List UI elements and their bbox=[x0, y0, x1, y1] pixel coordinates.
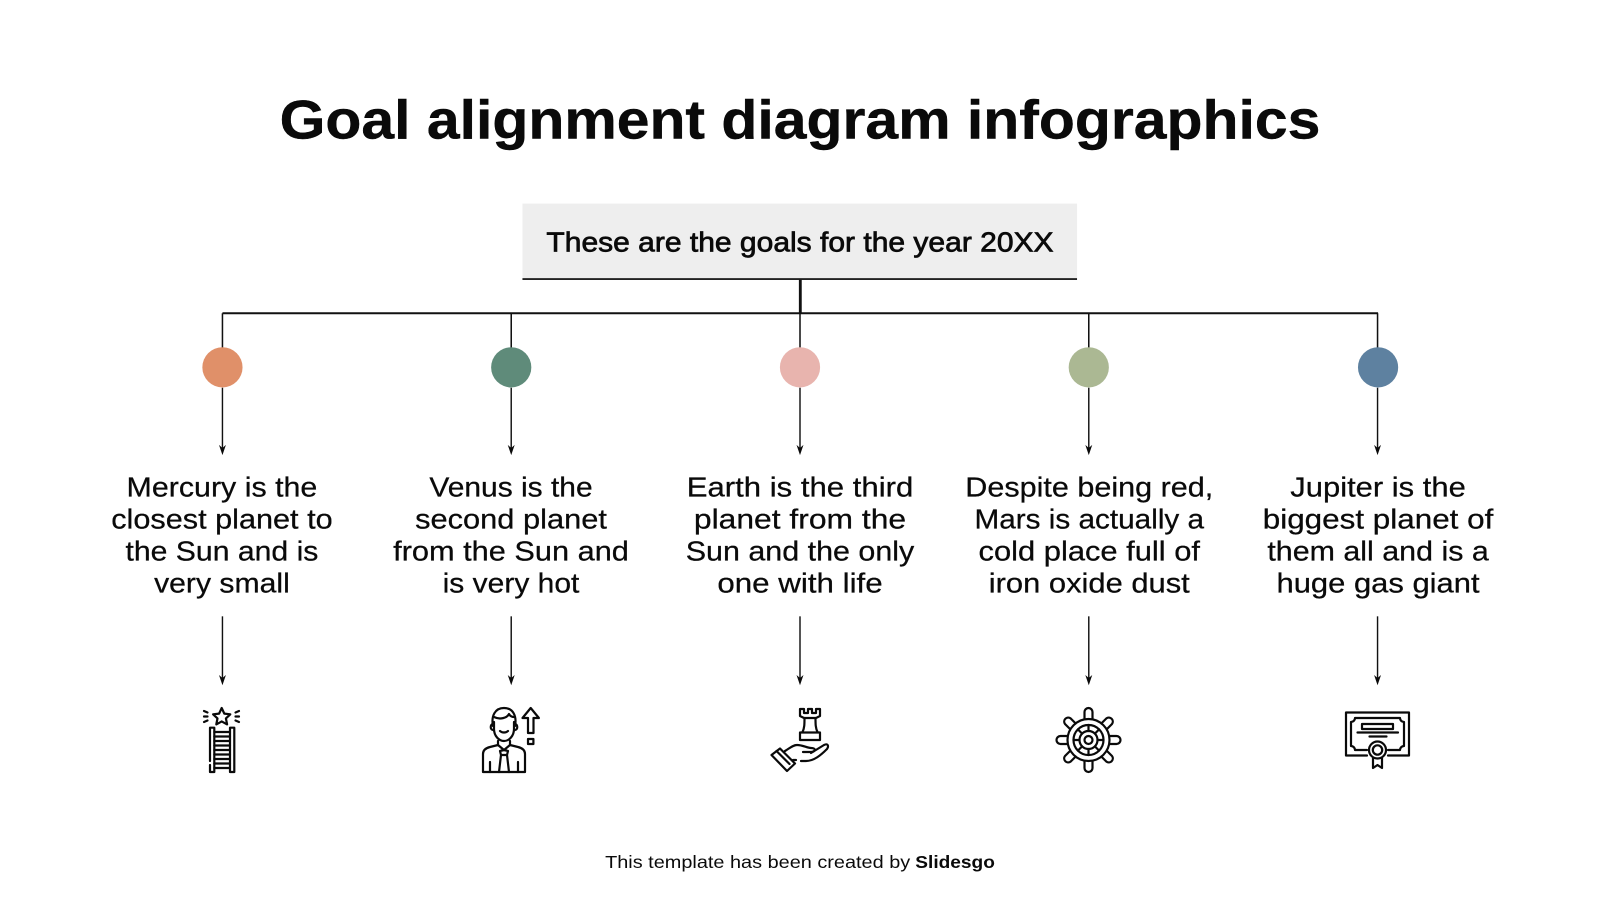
text: Earth: Earth is the third bbox=[687, 471, 913, 502]
text: Venus: is very hot bbox=[443, 567, 580, 598]
icon: ladder and star bbox=[204, 708, 239, 772]
title: Goal alignment diagram infographics bbox=[280, 88, 1320, 150]
text: Earth: one with life bbox=[717, 567, 883, 598]
marker: orange circle bbox=[202, 347, 243, 387]
text: Venus bbox=[393, 471, 629, 598]
text: Jupiter bbox=[1263, 471, 1494, 598]
icon: certificate with seal bbox=[1346, 712, 1409, 768]
arrow to icon bbox=[1085, 616, 1092, 685]
arrow to icon bbox=[797, 616, 803, 685]
text: Earth: Sun and the only bbox=[686, 536, 915, 567]
text: Mars: cold place full of bbox=[979, 536, 1200, 567]
text: Venus: Venus is the bbox=[429, 471, 593, 502]
text: Mars bbox=[965, 471, 1213, 598]
goal box bbox=[522, 204, 1077, 279]
column: Mercury bbox=[111, 347, 333, 772]
marker: green circle bbox=[491, 347, 531, 387]
text: Mars: iron oxide dust bbox=[989, 567, 1190, 598]
text: Mars: Mars is actually a bbox=[974, 504, 1205, 535]
marker: olive circle bbox=[1069, 347, 1109, 387]
arrow to icon bbox=[219, 616, 226, 685]
text: Mars: Despite being red, bbox=[965, 471, 1213, 502]
text: Mercury: closest planet to bbox=[111, 504, 333, 535]
marker: pink circle bbox=[780, 347, 820, 387]
arrow to text bbox=[1085, 388, 1092, 455]
text: Jupiter: biggest planet of bbox=[1263, 504, 1494, 535]
text: Jupiter: Jupiter is the bbox=[1290, 471, 1466, 502]
goal box text: These are the goals for the year 20XX bbox=[546, 227, 1054, 258]
text: Mercury: Mercury is the bbox=[127, 471, 317, 502]
text: Jupiter: them all and is a bbox=[1267, 536, 1490, 567]
column: Venus bbox=[393, 347, 629, 772]
text: Mercury: the Sun and is bbox=[126, 536, 318, 567]
text: Venus: second planet bbox=[415, 504, 607, 535]
column: Jupiter bbox=[1263, 347, 1494, 768]
text: Mercury: very small bbox=[154, 567, 290, 598]
column: Mars bbox=[965, 347, 1213, 772]
footer credit: Slidesgo bbox=[915, 852, 995, 872]
column: Earth bbox=[686, 347, 915, 771]
arrow to text bbox=[219, 388, 226, 455]
arrow to icon bbox=[1374, 616, 1381, 685]
footer credit: This template has been created by bbox=[605, 852, 910, 872]
arrow to text bbox=[797, 388, 803, 455]
connector tree bbox=[222, 280, 1378, 349]
arrow to text bbox=[1374, 388, 1381, 455]
text: Venus: from the Sun and bbox=[393, 536, 629, 567]
icon: hand holding rook bbox=[772, 709, 828, 771]
icon: ship wheel bbox=[1056, 708, 1120, 772]
icon: employee with up arrow bbox=[483, 708, 539, 772]
text: Jupiter: huge gas giant bbox=[1277, 567, 1480, 598]
arrow to text bbox=[508, 388, 515, 455]
marker: blue circle bbox=[1358, 347, 1398, 387]
arrow to icon bbox=[508, 616, 515, 685]
text: Earth: planet from the bbox=[694, 504, 906, 535]
text: Mercury bbox=[111, 471, 333, 598]
text: Earth bbox=[686, 471, 915, 598]
